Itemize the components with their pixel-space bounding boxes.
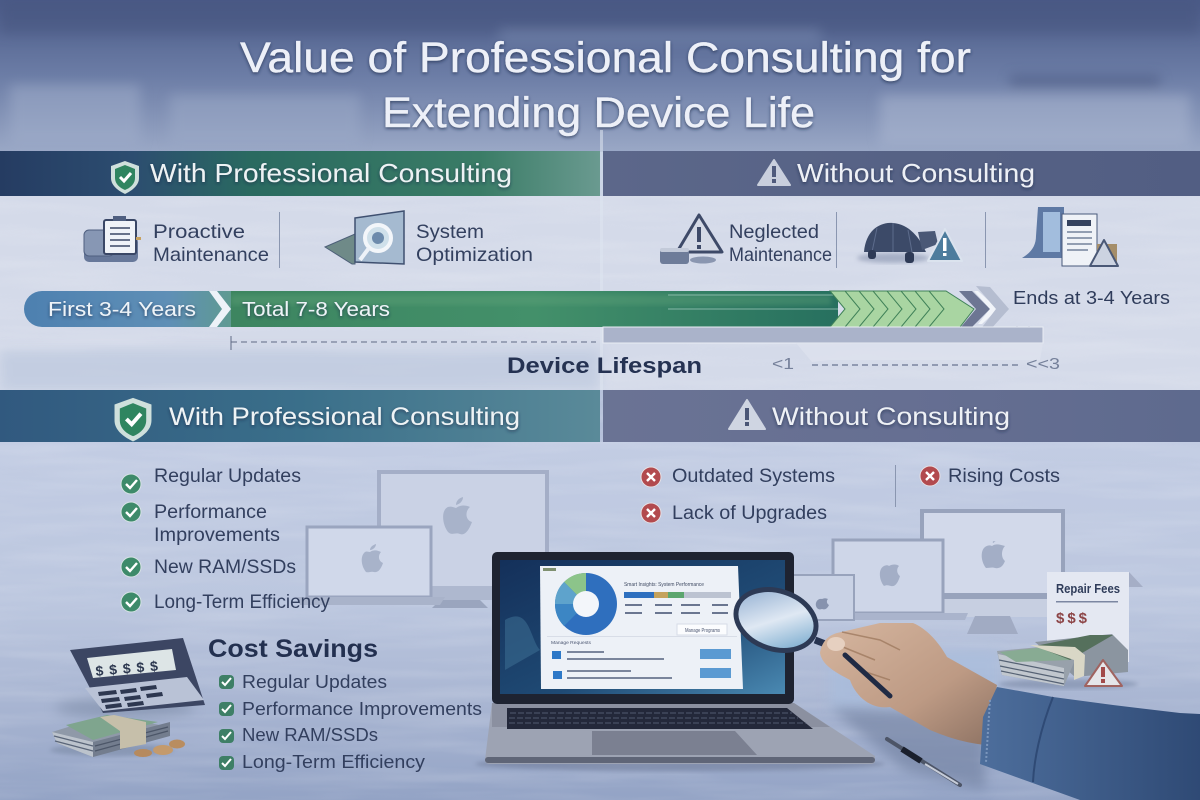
item: regular updates: Regular Updates bbox=[154, 466, 301, 487]
text: neglected maintenance: Neglected bbox=[729, 221, 819, 243]
icon: shield check large bbox=[115, 398, 151, 441]
heading: With Professional Consulting bbox=[169, 403, 520, 431]
dashboard window: Manage Requests bbox=[551, 640, 592, 645]
text: proactive maintenance: Proactive bbox=[153, 221, 245, 243]
text: ends at 3-4 years: Ends at 3-4 Years bbox=[1013, 288, 1170, 308]
text: neglected maintenance: Maintenance bbox=[729, 244, 832, 266]
icon: small laptop bbox=[791, 575, 854, 620]
panel: proactive maintenance and system optimization bbox=[84, 211, 533, 268]
lifespan scale: <<3 bbox=[1026, 356, 1060, 373]
icon: repair fees card bbox=[1047, 572, 1143, 662]
lifespan scale bbox=[231, 327, 1060, 378]
lifespan scale: <1 bbox=[772, 356, 794, 373]
title bbox=[240, 34, 971, 137]
item: lack of upgrades: Lack of Upgrades bbox=[672, 503, 827, 524]
panel: without consulting header bbox=[603, 151, 1200, 196]
icon: laptop bbox=[296, 527, 445, 605]
item: long-term efficiency: Long-Term Efficiency bbox=[154, 592, 330, 613]
panel: cost savings bbox=[208, 635, 482, 772]
text: proactive maintenance bbox=[153, 221, 269, 266]
timeline bar: Total 7-8 Years bbox=[242, 299, 390, 321]
timeline bar: First 3-4 Years bbox=[48, 299, 196, 321]
item: new ram and ssds: New RAM/SSDs bbox=[154, 557, 296, 578]
timeline bar bbox=[24, 286, 1170, 333]
text: system optimization: System bbox=[416, 221, 484, 243]
dashboard window: Smart Insights: System Performance bbox=[624, 582, 704, 588]
magnifier lens bbox=[728, 580, 846, 660]
item: rising costs: Rising Costs bbox=[948, 466, 1060, 487]
dashboard window: Manage Programs bbox=[685, 628, 720, 634]
donut chart bbox=[555, 573, 617, 635]
title: Value of Professional Consulting for bbox=[240, 34, 971, 82]
stacked progress bar bbox=[624, 592, 731, 598]
icon: shield check bbox=[111, 161, 139, 194]
text: system optimization bbox=[416, 221, 533, 266]
checklist: without consulting bbox=[641, 465, 1060, 524]
panel: neglected maintenance and risks bbox=[660, 207, 1118, 268]
laptop bbox=[475, 552, 885, 771]
laptop screen bbox=[492, 552, 794, 704]
hand with magnifying glass bbox=[728, 580, 1200, 800]
item: performance improvements: Performance Improvements bbox=[242, 699, 482, 719]
desk pen bbox=[887, 739, 960, 785]
title: Extending Device Life bbox=[382, 89, 815, 137]
icon: calculator: $ $ $ $ $ bbox=[95, 658, 160, 679]
heading: Without Consulting bbox=[772, 403, 1010, 431]
icon: desktop monitor right bbox=[920, 511, 1063, 634]
devices: left background bbox=[296, 472, 549, 608]
text: neglected maintenance bbox=[729, 221, 832, 266]
magnifier handle bbox=[845, 655, 890, 696]
icon: turtle with warning bbox=[857, 223, 962, 263]
icon: laptop right bbox=[820, 540, 968, 620]
text: proactive maintenance: Maintenance bbox=[153, 244, 269, 266]
bar: first 3-4 years bbox=[24, 291, 231, 327]
icon: system optimization bbox=[325, 211, 404, 264]
hand bbox=[820, 623, 997, 745]
item: long-term efficiency: Long-Term Efficiency bbox=[242, 752, 425, 772]
icon: documents with warning bbox=[1022, 207, 1118, 266]
text: system optimization: Optimization bbox=[416, 244, 533, 266]
panel: with consulting header bbox=[0, 151, 600, 196]
icon: repair fees card: $$$ bbox=[1056, 610, 1090, 627]
heading: Cost Savings bbox=[208, 635, 378, 663]
arrow: first segment chevron bbox=[209, 291, 231, 327]
devices: right background bbox=[791, 511, 1063, 634]
bar: total 7-8 years bbox=[231, 291, 838, 327]
checklist: with consulting bbox=[121, 466, 330, 613]
item: performance improvements bbox=[121, 502, 280, 546]
shirt sleeve bbox=[980, 687, 1200, 800]
heading: Without Consulting bbox=[797, 158, 1035, 188]
warning triangle bbox=[1085, 660, 1122, 686]
item: outdated systems: Outdated Systems bbox=[672, 466, 835, 487]
heading: With Professional Consulting bbox=[150, 158, 512, 188]
item: new ram and ssds: New RAM/SSDs bbox=[242, 725, 378, 745]
item: regular updates: Regular Updates bbox=[242, 672, 387, 692]
item: regular updates bbox=[121, 466, 301, 494]
dashboard window bbox=[540, 566, 743, 689]
icon: repair fees card: Repair Fees bbox=[1056, 582, 1120, 596]
icon: cash stack with warning bbox=[997, 634, 1138, 689]
item: performance improvements: Performance bbox=[154, 502, 267, 523]
arrows: grey chevrons bbox=[959, 291, 990, 327]
heading: device lifespan: Device Lifespan bbox=[507, 353, 702, 378]
icon: warning bbox=[758, 160, 790, 185]
icon: desktop monitor bbox=[377, 472, 549, 608]
laptop base bbox=[485, 703, 875, 764]
arrows: green chevrons bbox=[830, 291, 974, 327]
icon: warning large bbox=[729, 400, 765, 429]
icon: calculator bbox=[55, 638, 205, 718]
icon: warning and coins bbox=[660, 215, 722, 264]
icon: cash and coins bbox=[50, 715, 185, 757]
icon: clipboard bbox=[84, 216, 141, 262]
panel: with consulting benefits header bbox=[0, 390, 600, 442]
item: performance improvements: Improvements bbox=[154, 525, 280, 546]
panel: without consulting risks header bbox=[603, 390, 1200, 442]
